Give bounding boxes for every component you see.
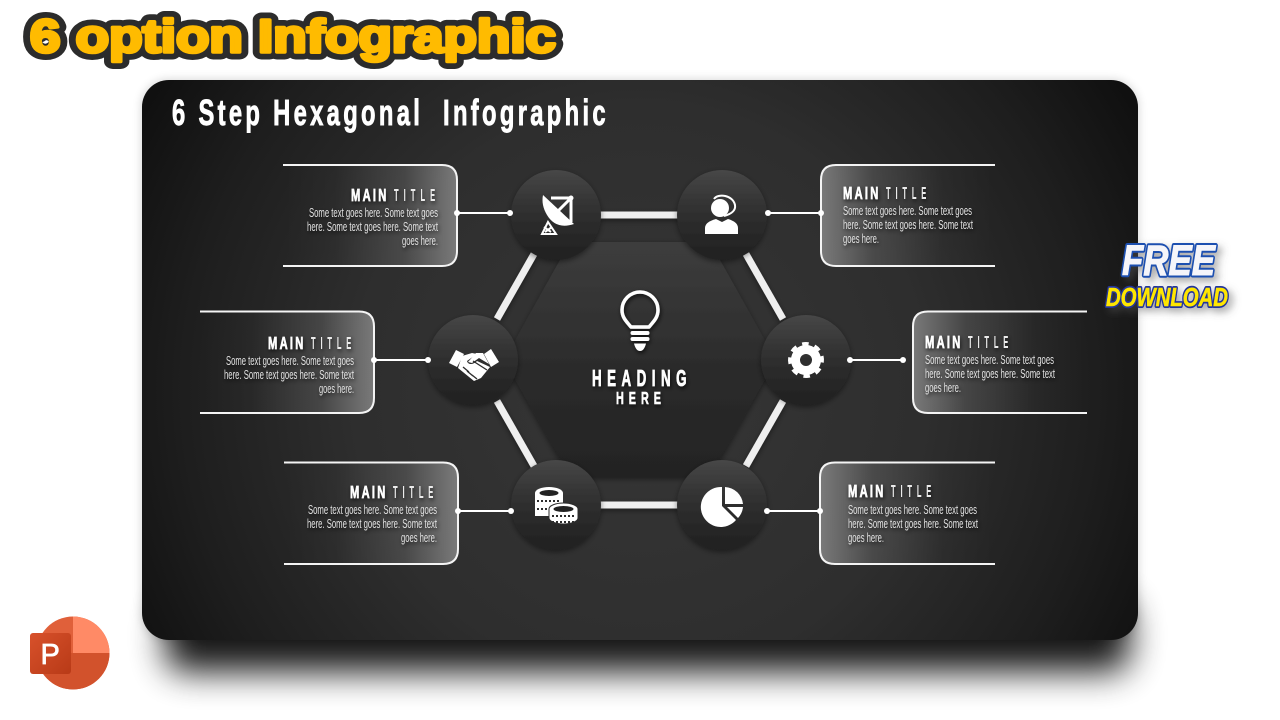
center heading: HEADING — [592, 365, 687, 391]
icon: gear — [787, 341, 825, 379]
text block — [307, 185, 438, 248]
title: 6 option Infographic: 6 option Infographic — [30, 10, 556, 62]
text block: MAIN — [268, 333, 303, 354]
text block: goes here. — [319, 382, 354, 396]
badge: free download: FREE — [1122, 237, 1216, 285]
text block — [307, 482, 437, 545]
callout: top left — [283, 165, 513, 266]
text block: goes here. — [402, 234, 438, 248]
text block: Some text goes here. Some text goes — [925, 353, 1054, 367]
text block — [925, 332, 1055, 395]
badge: free download: FREE — [1122, 237, 1216, 285]
text block — [848, 481, 978, 545]
text block: MAIN — [843, 183, 878, 204]
icon: PowerPoint logo — [30, 616, 110, 690]
text block: goes here. — [401, 531, 437, 545]
node: handshake — [428, 315, 518, 405]
slide heading: 6 Step Hexagonal Infographic — [172, 93, 606, 133]
text block: MAIN — [350, 482, 385, 503]
text block: here. Some text goes here. Some text — [848, 517, 978, 531]
title: 6 option Infographic: 6 option Infographic — [30, 10, 556, 62]
panel shadow — [142, 80, 1138, 672]
icon: pie chart — [701, 487, 743, 527]
connector — [371, 357, 431, 363]
badge: free download: DOWNLOAD — [1106, 282, 1228, 312]
callout: bottom right — [764, 462, 995, 564]
text block: MAIN — [351, 185, 386, 206]
central hexagon — [504, 242, 776, 477]
text block — [843, 183, 973, 246]
hexagon ring connectors — [497, 215, 783, 505]
callout: bottom left — [284, 462, 514, 564]
connector — [454, 210, 513, 216]
icon: coins — [535, 487, 578, 524]
text block: TITLE — [394, 185, 435, 205]
text block: TITLE — [891, 481, 931, 501]
text block: TITLE — [311, 333, 351, 353]
text block: here. Some text goes here. Some text — [307, 220, 438, 234]
callout: top right — [765, 165, 995, 266]
text block: Some text goes here. Some text goes — [848, 503, 977, 517]
node: customer support — [677, 170, 767, 260]
text block: here. Some text goes here. Some text — [224, 368, 354, 382]
text block: Some text goes here. Some text goes — [226, 354, 354, 368]
node: coins — [511, 460, 601, 550]
icon: light bulb — [622, 292, 658, 351]
text block: MAIN — [925, 332, 960, 353]
text block: Some text goes here. Some text goes — [308, 503, 437, 517]
icon: dish — [542, 195, 574, 234]
icon: handshake — [449, 349, 499, 381]
connector — [455, 508, 514, 514]
center heading — [592, 365, 687, 409]
connector — [765, 210, 824, 216]
text block: TITLE — [886, 183, 926, 203]
text block: MAIN — [848, 481, 883, 502]
panel: dark slide — [142, 80, 1138, 640]
node: satellite dish — [511, 170, 601, 260]
center heading: HERE — [616, 389, 661, 409]
icon: headset person — [705, 196, 738, 234]
text block: goes here. — [848, 531, 884, 545]
text block: Some text goes here. Some text goes — [843, 204, 972, 218]
text block: TITLE — [393, 482, 433, 502]
node: pie chart — [677, 460, 767, 550]
text block: here. Some text goes here. Some text — [307, 517, 437, 531]
callout: middle right — [847, 312, 1087, 413]
text block: TITLE — [968, 332, 1008, 352]
callout: middle left — [200, 312, 431, 413]
text block: Some text goes here. Some text goes — [309, 206, 438, 220]
icon: PowerPoint logo: P — [40, 639, 60, 671]
text block: goes here. — [925, 381, 961, 395]
text block: here. Some text goes here. Some text — [925, 367, 1055, 381]
connector — [764, 508, 823, 514]
text block — [224, 333, 354, 396]
connector — [847, 357, 906, 363]
node: gear — [761, 315, 851, 405]
badge: free download — [1106, 237, 1228, 312]
badge: free download: DOWNLOAD — [1106, 282, 1228, 312]
text block: here. Some text goes here. Some text — [843, 218, 973, 232]
text block: goes here. — [843, 232, 879, 246]
